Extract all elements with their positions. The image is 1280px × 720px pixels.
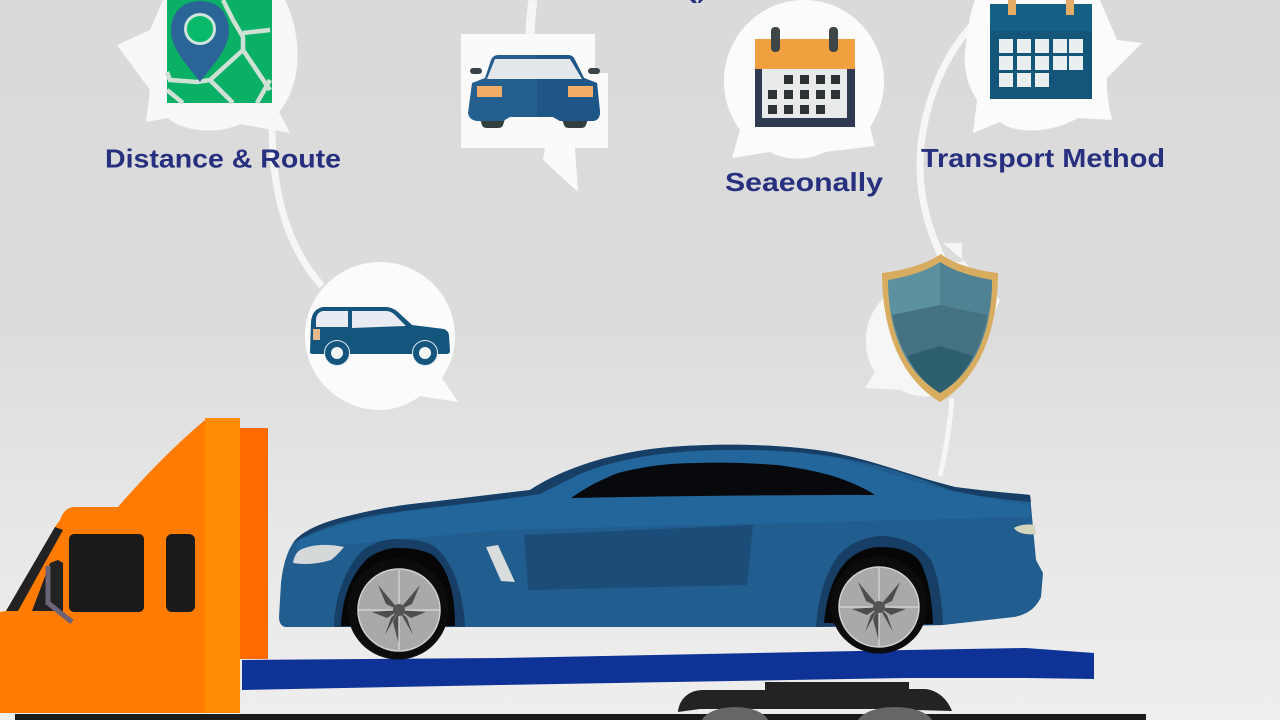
bubble: vehicle type front view xyxy=(461,34,608,192)
icon: teal calendar xyxy=(990,0,1092,99)
rear wheel arch inner xyxy=(824,547,933,624)
label: Distance & Route: Distance & Route xyxy=(105,144,341,174)
connector: top to vehicle type bubble xyxy=(530,0,533,38)
front rim xyxy=(358,569,440,651)
ground line xyxy=(15,714,1146,720)
icon: SUV xyxy=(310,307,450,366)
bubble: insurance shield xyxy=(865,243,1000,402)
rear window xyxy=(166,534,195,612)
connector: route to vehicle bubble xyxy=(272,125,322,286)
speech bubble shape xyxy=(724,0,884,159)
rear tire xyxy=(830,556,928,654)
rear rim xyxy=(839,567,919,647)
tiny cut-off glyph at top edge xyxy=(690,0,703,3)
bubble: Distance & Route xyxy=(105,0,341,174)
side vent xyxy=(486,545,515,582)
bubble: vehicle size side view xyxy=(305,262,458,410)
tail light xyxy=(1014,524,1036,534)
bubble: Transport Method xyxy=(921,0,1165,173)
side window small xyxy=(32,560,63,611)
door dark panel xyxy=(524,525,753,590)
truck chassis under flatbed xyxy=(678,682,952,712)
bubble: Seasonality xyxy=(724,0,884,197)
connector: insurance to car xyxy=(940,398,952,476)
flatbed deck xyxy=(242,648,1094,690)
icon: orange calendar xyxy=(755,27,855,127)
connector: transport method to insurance xyxy=(920,15,982,258)
cab body xyxy=(0,420,240,713)
front tire xyxy=(348,558,448,660)
speech bubble shape xyxy=(865,243,1000,397)
shoulder highlight xyxy=(295,450,1030,550)
cab rear fairing xyxy=(240,428,268,659)
label: Transport Method: Transport Method xyxy=(921,143,1165,173)
truck rear wheels xyxy=(701,707,933,720)
speech bubble shape xyxy=(965,0,1142,133)
speech bubble shape xyxy=(461,34,608,192)
front wheel arch inner xyxy=(341,548,455,626)
main window xyxy=(69,534,144,612)
speech bubble shape xyxy=(305,262,458,410)
rear wheel arch outer xyxy=(816,536,943,627)
icon: car front view xyxy=(468,55,600,128)
label: Seasonality: Seaeonally xyxy=(725,167,884,197)
mirror xyxy=(48,566,72,622)
icon: map with location pin xyxy=(167,0,272,103)
front wheel arch outer xyxy=(334,539,465,627)
windshield xyxy=(6,527,63,611)
headlight xyxy=(293,545,344,564)
roof dark edge xyxy=(293,445,1031,543)
speech bubble shape xyxy=(117,0,298,133)
car body xyxy=(279,445,1043,627)
icon: shield xyxy=(882,254,998,402)
blue sedan on flatbed xyxy=(279,445,1043,660)
window xyxy=(571,463,875,498)
cab vertical light band xyxy=(205,418,240,713)
orange truck cab xyxy=(0,418,268,713)
